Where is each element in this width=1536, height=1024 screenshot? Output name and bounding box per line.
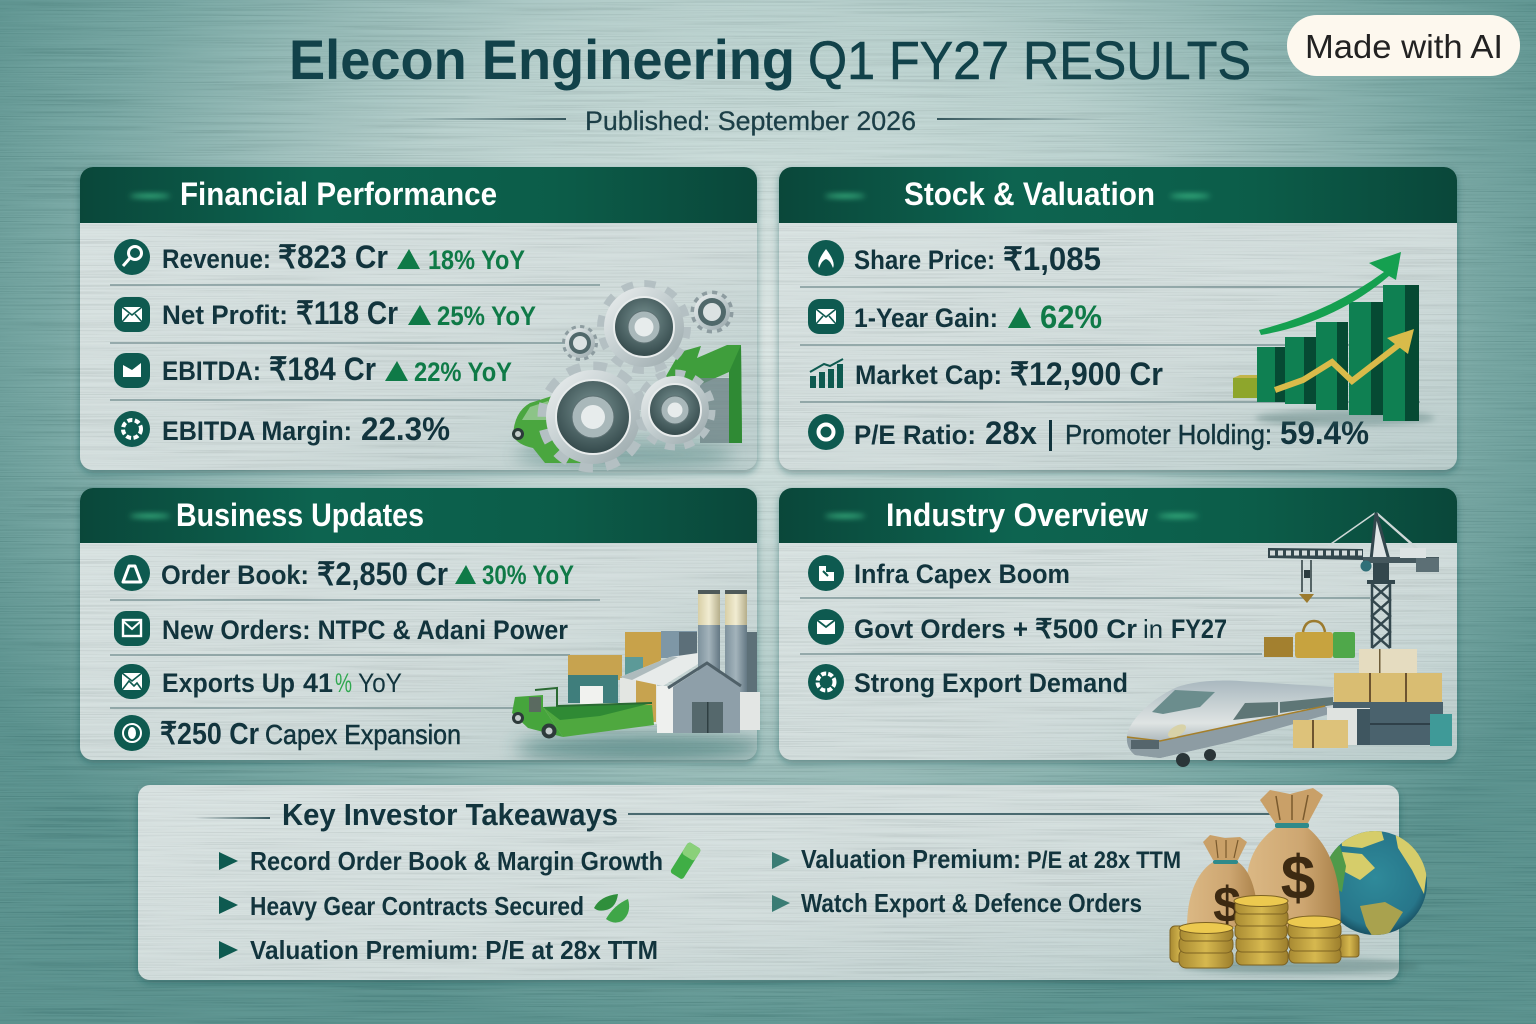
illustration: factory and truck	[512, 590, 760, 738]
coin stacks	[1170, 896, 1359, 968]
publication date: Published: September 2026	[585, 106, 916, 136]
title	[289, 28, 1251, 91]
row: net profit: ₹118 Cr	[296, 295, 398, 331]
row: capex: Capex Expansion	[265, 719, 461, 750]
row: government orders: ₹500 Cr	[1035, 614, 1138, 644]
heading: industry overview: Industry Overview	[886, 497, 1148, 533]
money bag: small: $	[1213, 877, 1241, 933]
right takeaways list	[772, 844, 1181, 918]
row: net profit	[114, 295, 536, 332]
heading: financial performance: Financial Performance	[180, 176, 497, 212]
title: Q1 FY27 RESULTS	[808, 31, 1251, 91]
right takeaways list: Valuation Premium:	[801, 844, 1021, 874]
panel: industry overview	[779, 488, 1457, 767]
money bag: small	[1187, 835, 1258, 933]
left takeaways list: Heavy Gear Contracts Secured	[250, 891, 584, 921]
row: export demand	[808, 664, 1128, 700]
row: capex: ₹250 Cr	[160, 716, 259, 751]
illustration: crane, cargo and train	[1127, 513, 1452, 767]
row: PE ratio and promoter holding: P/E Ratio:	[854, 420, 976, 450]
heading: stock and valuation: Stock & Valuation	[904, 176, 1155, 212]
row: exports	[114, 664, 402, 699]
row: order book: Order Book:	[161, 560, 309, 590]
row: EBITDA margin	[114, 411, 450, 447]
row: order book: ₹2,850 Cr	[317, 556, 448, 592]
heading: business updates: Business Updates	[176, 497, 424, 533]
row: exports: YoY	[358, 668, 402, 698]
row: government orders: Govt Orders +	[854, 614, 1028, 644]
icon: green leaves	[594, 894, 629, 923]
title: Elecon Engineering	[289, 28, 795, 91]
row: EBITDA: EBITDA:	[162, 356, 261, 386]
badge: made with AI: Made with AI	[1305, 28, 1503, 65]
row: PE ratio and promoter holding	[808, 414, 1369, 451]
row: capex	[114, 715, 461, 751]
left takeaways list	[219, 846, 663, 965]
row: government orders: FY27	[1171, 614, 1227, 644]
row: market cap: Market Cap:	[855, 360, 1002, 390]
row: government orders	[808, 609, 1227, 645]
row: one-year gain: 62%	[1040, 299, 1102, 335]
row: net profit: 25% YoY	[437, 301, 536, 331]
row: one-year gain	[808, 299, 1102, 335]
row: one-year gain: 1-Year Gain:	[854, 303, 998, 333]
money bag: large	[1247, 788, 1341, 932]
row: exports: %	[335, 668, 352, 698]
row: share price: ₹1,085	[1003, 241, 1101, 277]
row: PE ratio and promoter holding: 28x	[985, 415, 1037, 451]
row: revenue: 18% YoY	[428, 245, 525, 275]
panel: stock and valuation	[779, 167, 1457, 470]
panel: key investor takeaways	[138, 785, 1427, 980]
row: EBITDA margin: 22.3%	[361, 411, 450, 447]
row: exports: 41	[303, 668, 333, 698]
row: PE ratio and promoter holding: Promoter Holding:	[1065, 419, 1272, 450]
row: revenue: ₹823 Cr	[278, 239, 388, 275]
panel: business updates	[80, 488, 765, 762]
heading: key investor takeaways: Key Investor Takeaways	[282, 797, 618, 832]
row: order book	[114, 555, 574, 592]
row: share price	[808, 240, 1101, 277]
row: order book: 30% YoY	[482, 560, 574, 590]
illustration: gears with car and arrow	[512, 287, 742, 464]
row: revenue: Revenue:	[162, 244, 271, 274]
row: market cap: ₹12,900 Cr	[1010, 356, 1163, 392]
row: share price: Share Price:	[854, 245, 995, 275]
row: EBITDA: 22% YoY	[414, 357, 512, 387]
row: new orders: New Orders: NTPC & Adani Power	[162, 615, 568, 645]
right takeaways list: Watch Export & Defence Orders	[801, 888, 1142, 918]
badge: made with AI	[1287, 15, 1520, 76]
illustration: money bags, coins and globe	[1170, 788, 1427, 974]
row: government orders: in	[1143, 614, 1163, 644]
left takeaways list: Record Order Book & Margin Growth	[250, 846, 663, 876]
row: infra capex: Infra Capex Boom	[854, 559, 1070, 589]
row: market cap	[810, 356, 1163, 392]
right takeaways list: P/E at 28x TTM	[1027, 847, 1181, 874]
row: PE ratio and promoter holding: 59.4%	[1280, 415, 1369, 451]
row: net profit: Net Profit:	[162, 300, 288, 330]
row: EBITDA: ₹184 Cr	[269, 351, 376, 387]
icon: green pill	[670, 841, 701, 880]
row: revenue	[114, 239, 525, 275]
globe	[1330, 831, 1427, 935]
row: exports: Exports Up	[162, 668, 295, 698]
row: infra capex	[808, 555, 1070, 591]
row: export demand: Strong Export Demand	[854, 668, 1128, 698]
money bag: large: $	[1281, 844, 1315, 913]
row: EBITDA margin: EBITDA Margin:	[162, 416, 352, 446]
left takeaways list: Valuation Premium: P/E at 28x TTM	[250, 935, 658, 965]
row: EBITDA	[114, 351, 512, 388]
illustration: rising bar chart with arrows	[1233, 252, 1435, 426]
panel: financial performance	[80, 167, 757, 470]
